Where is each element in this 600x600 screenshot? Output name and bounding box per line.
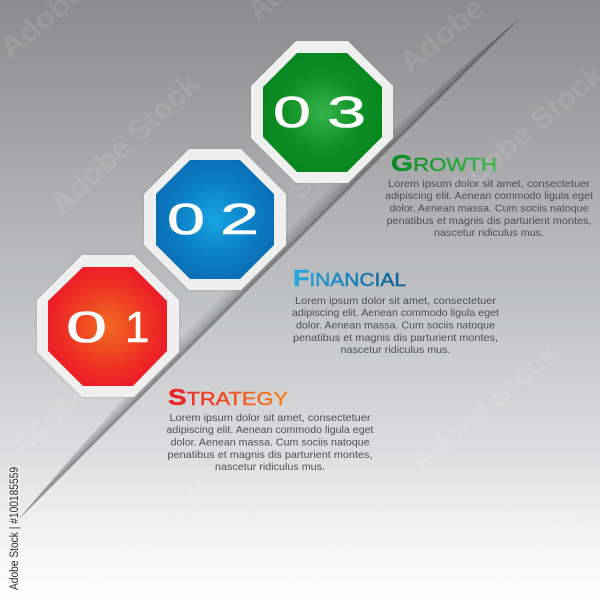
number 02 <box>167 195 259 244</box>
watermark text: Adobe Stock <box>405 336 565 477</box>
number 03 <box>273 88 366 137</box>
number 03: 3 <box>327 88 366 137</box>
text block: Financial: Lorem ipsum dolor sit amet, consectetuer <box>295 295 497 307</box>
text block: Growth: Lorem ipsum dolor sit amet, consectetuer <box>388 178 591 190</box>
octagon 03 green <box>251 41 393 183</box>
text block: Financial: nascetur ridiculus mus. <box>340 344 450 356</box>
text block: Growth: adipiscing elit. Aenean commodo ligula eget <box>385 190 593 202</box>
octagon 02 blue <box>144 149 286 290</box>
heading: Financial: FINANCIAL <box>293 265 406 291</box>
text block: Strategy <box>166 412 374 473</box>
text block: Financial <box>292 295 499 356</box>
text block: Growth: penatibus et magnis dis parturient montes, <box>386 215 592 227</box>
text block: Financial: adipiscing elit. Aenean commodo ligula eget <box>292 307 499 319</box>
text block: Strategy: adipiscing elit. Aenean commodo ligula eget <box>166 424 374 436</box>
number 02: 0 <box>167 195 205 244</box>
text block: Financial: penatibus et magnis dis parturient montes, <box>293 332 498 344</box>
text block: Growth: dolor. Aenean massa. Cum sociis natoque <box>390 202 589 214</box>
watermark text: Adobe Stock <box>44 67 206 221</box>
text block: Strategy: penatibus et magnis dis parturient montes, <box>168 449 372 461</box>
watermark text: Adobe Stock <box>3 316 170 463</box>
text block: Growth: nascetur ridiculus mus. <box>434 227 544 239</box>
watermark text: Adobe Stock <box>78 469 222 597</box>
number 03: 0 <box>273 88 311 137</box>
text block: Strategy: dolor. Aenean massa. Cum sociis natoque <box>170 436 370 448</box>
stock id caption: Adobe Stock | #100185559 <box>9 467 21 590</box>
octagon 01 red <box>37 255 179 397</box>
text block: Financial: dolor. Aenean massa. Cum sociis natoque <box>296 320 495 332</box>
number 02: 2 <box>220 195 259 244</box>
diagonal paper crease shadow <box>17 18 520 521</box>
watermark text: Adobe Stock <box>201 128 368 275</box>
text block: Strategy: nascetur ridiculus mus. <box>215 461 325 473</box>
number 01 <box>66 302 149 352</box>
number 01: 1 <box>125 303 149 352</box>
heading: Growth: GROWTH <box>391 150 497 176</box>
text block: Strategy: Lorem ipsum dolor sit amet, consectetuer <box>170 412 371 424</box>
text block: Growth <box>385 178 593 239</box>
heading: Strategy: STRATEGY <box>168 384 288 410</box>
number 01: 0 <box>66 302 107 351</box>
